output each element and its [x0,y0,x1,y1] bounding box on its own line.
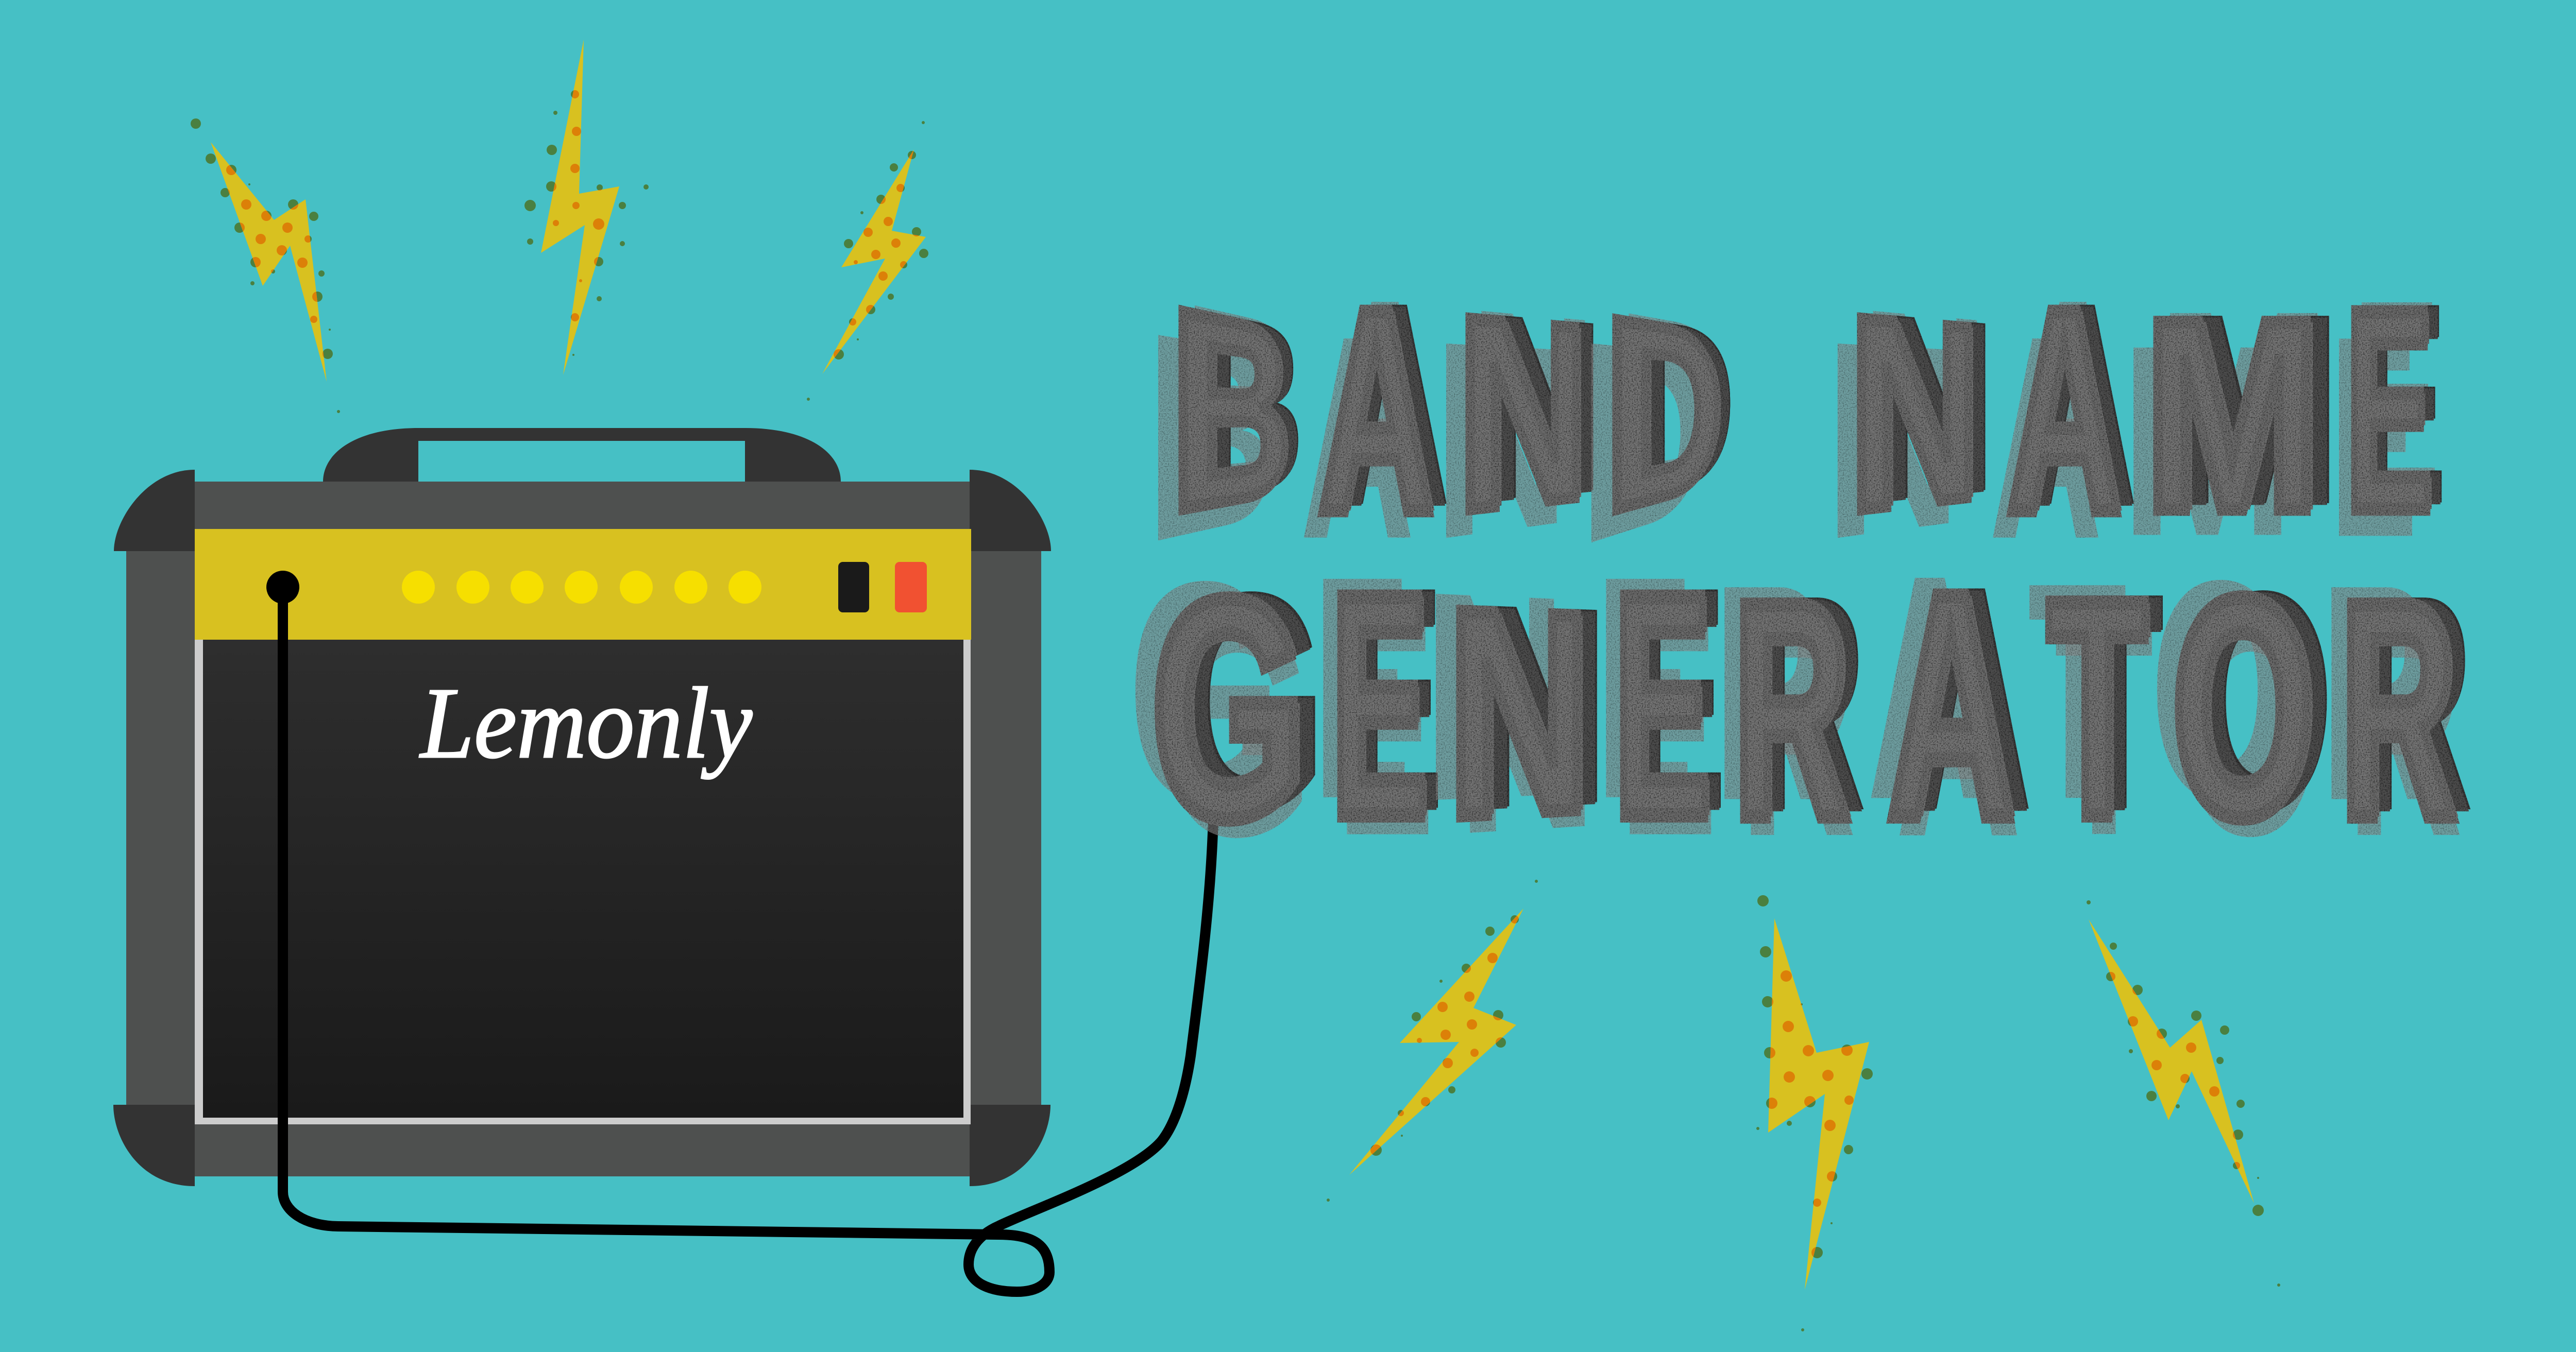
letter O: O [2172,534,2314,882]
icon: lightning bolt bottom right [2087,900,2280,1287]
logo: Lemonly: Lemonly [419,666,753,779]
letter N: N [1848,258,1978,570]
letter R: R [2340,538,2456,882]
control panel [195,529,971,640]
icon: lightning bolt top right [807,121,928,401]
amp top corners [114,470,1051,551]
icon: lightning bolt bottom left [1327,880,1538,1202]
guitar cable [266,571,1213,1292]
amp bottom corners [113,1105,1050,1186]
title: Band Name Generator [1136,246,2471,884]
letter M: M [2144,264,2320,568]
letter E: E [1331,528,1428,883]
speaker grille [203,640,963,1118]
amp bottom band [195,1120,970,1176]
title line: BAND NAME [1158,246,2442,573]
letter G: G [1151,535,1306,883]
letter A: A [1318,249,1433,572]
letter B: B [1169,246,1290,573]
letter N: N [1456,258,1587,570]
icon: lightning bolt top centre [524,40,649,375]
letter R: R [1733,538,1849,882]
amp handle [323,428,841,482]
control knobs [402,571,761,604]
letter T: T [2047,536,2147,881]
letter A: A [1888,527,2014,884]
icon: lightning bolt bottom centre [1756,895,1873,1331]
icon: lightning bolt top left [191,118,340,413]
orange switch [895,562,927,612]
letter A: A [2007,249,2121,572]
amp side panels [126,546,1041,1110]
letter E: E [2346,250,2432,570]
speaker frame [195,636,971,1124]
black switch [838,562,869,612]
letter E: E [1614,528,1710,883]
title line: GENERATOR [1136,527,2471,884]
letter N: N [1447,547,1589,880]
letter D: D [1603,258,1722,573]
amp top band [195,482,970,533]
guitar amplifier [113,428,1051,1186]
